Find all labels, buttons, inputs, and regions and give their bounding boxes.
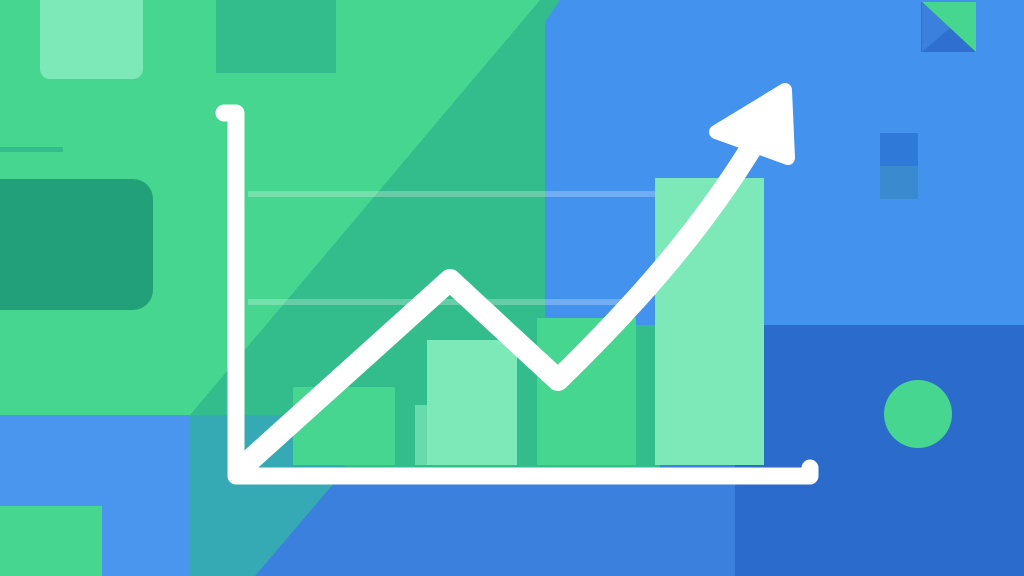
bar chart: [293, 178, 764, 465]
rect: light green rounded: [40, 0, 143, 79]
square: bottom-left green: [0, 506, 102, 576]
teal diagonal band: [190, 0, 660, 576]
icon: green circle: [884, 380, 952, 448]
panel: center-bottom blue: [255, 476, 1024, 576]
icon: triangle square: [921, 2, 976, 52]
icon: small stacked squares: [880, 133, 918, 199]
panel: bottom-right dark blue: [735, 325, 1024, 576]
panel: mid-right blue: [660, 325, 740, 485]
gridlines: [248, 191, 655, 305]
square: teal top: [216, 0, 336, 73]
panel: left-bottom blue: [0, 415, 190, 576]
panel: top-right blue: [545, 0, 1024, 325]
arrow: growth line: [248, 90, 788, 462]
rect: dark green rounded: [0, 179, 153, 310]
line: short teal: [0, 147, 63, 152]
axes: [224, 113, 810, 476]
panel: teal strip: [190, 415, 345, 576]
